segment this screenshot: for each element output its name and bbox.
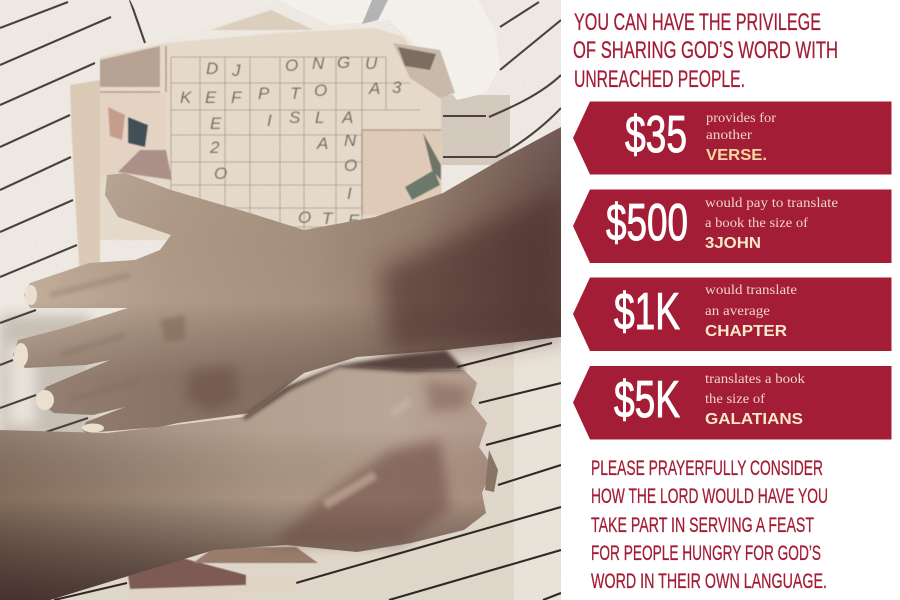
- handwritten crossword letters: N: [312, 54, 325, 73]
- handwritten crossword letters: G: [337, 53, 350, 72]
- handwritten crossword letters: J: [231, 61, 241, 80]
- panel: $500 banner: a book the size of: [705, 215, 809, 230]
- handwritten crossword letters: O: [214, 164, 227, 183]
- handwritten crossword letters: D: [206, 59, 218, 78]
- handwritten crossword letters: A: [341, 108, 353, 127]
- fingernails: [14, 285, 104, 432]
- photo: hands holding a worn Bible: [0, 0, 561, 600]
- handwritten crossword letters: E: [348, 211, 360, 230]
- handwritten crossword letters: [180, 53, 402, 230]
- panel: $35 banner: provides for: [706, 110, 777, 125]
- handwritten crossword letters: L: [315, 108, 324, 127]
- closing text block: [591, 456, 828, 593]
- white cloth at the top: [130, 0, 500, 100]
- handwritten crossword letters: K: [180, 88, 192, 107]
- panel: $35 banner: VERSE.: [706, 147, 767, 164]
- handwritten crossword letters: O: [344, 156, 357, 175]
- panel: $500 banner: [573, 190, 892, 263]
- worn Bible wrapped in newspaper: [70, 10, 455, 600]
- heading: [573, 9, 838, 93]
- panel: $500 banner: would pay to translate: [705, 195, 838, 210]
- cartoon panels: [100, 46, 160, 87]
- knuckle and vein shading: [185, 365, 240, 412]
- paper cover: [100, 28, 442, 240]
- panel: $35 banner: [573, 102, 892, 174]
- scraps of paper below the hands: [127, 547, 318, 600]
- handwritten crossword letters: P: [258, 84, 270, 103]
- panel: $35 banner: $35: [625, 106, 687, 164]
- panel: $1K banner: an average: [705, 303, 770, 318]
- panel: $35 banner: another: [706, 127, 753, 142]
- panel: $5K banner: $5K: [614, 371, 680, 429]
- ring: [485, 450, 498, 492]
- handwritten crossword letters: A: [316, 134, 328, 153]
- handwritten crossword letters: T: [290, 84, 302, 103]
- panel: $500 banner: 3JOHN: [705, 235, 761, 252]
- panel: $500 banner: $500: [606, 194, 688, 252]
- lower arm and hand: [0, 350, 498, 600]
- heading: UNREACHED PEOPLE.: [574, 66, 745, 93]
- handwritten crossword letters: I: [347, 184, 352, 203]
- shadow between the hands: [243, 350, 465, 420]
- page edges: [70, 80, 100, 278]
- panel: $5K banner: GALATIANS: [705, 411, 803, 428]
- fabric background with stripes: [0, 0, 561, 600]
- handwritten crossword letters: I: [267, 111, 272, 130]
- panel: $5K banner: the size of: [705, 391, 766, 406]
- handwritten crossword letters: O: [285, 56, 298, 75]
- skin and fabric grain: [0, 0, 561, 600]
- handwritten crossword letters: S: [289, 108, 301, 127]
- torn corner: [393, 43, 455, 98]
- handwritten crossword letters: E: [205, 88, 217, 107]
- handwritten crossword letters: N: [344, 131, 357, 150]
- handwritten crossword letters: T: [322, 209, 334, 228]
- handwritten crossword letters: U: [365, 54, 378, 73]
- handwritten crossword letters: F: [231, 88, 243, 107]
- handwritten crossword letters: O: [298, 208, 311, 227]
- panel: $1K banner: $1K: [614, 283, 680, 341]
- handwritten crossword letters: A: [368, 79, 380, 98]
- panel: $5K banner: [573, 366, 892, 440]
- handwritten crossword letters: 2: [209, 138, 220, 157]
- handwritten crossword letters: E: [210, 114, 222, 133]
- panel: $5K banner: translates a book: [705, 371, 805, 386]
- panel: $1K banner: would translate: [705, 282, 797, 297]
- knuckle shading: [270, 440, 450, 545]
- handwritten crossword letters: O: [314, 81, 327, 100]
- handwritten crossword letters: 3: [392, 78, 402, 97]
- panel: $1K banner: CHAPTER: [705, 323, 787, 340]
- upper arm and hand: [13, 127, 561, 433]
- crossword grid: [100, 46, 441, 240]
- panel: $1K banner: [573, 278, 892, 351]
